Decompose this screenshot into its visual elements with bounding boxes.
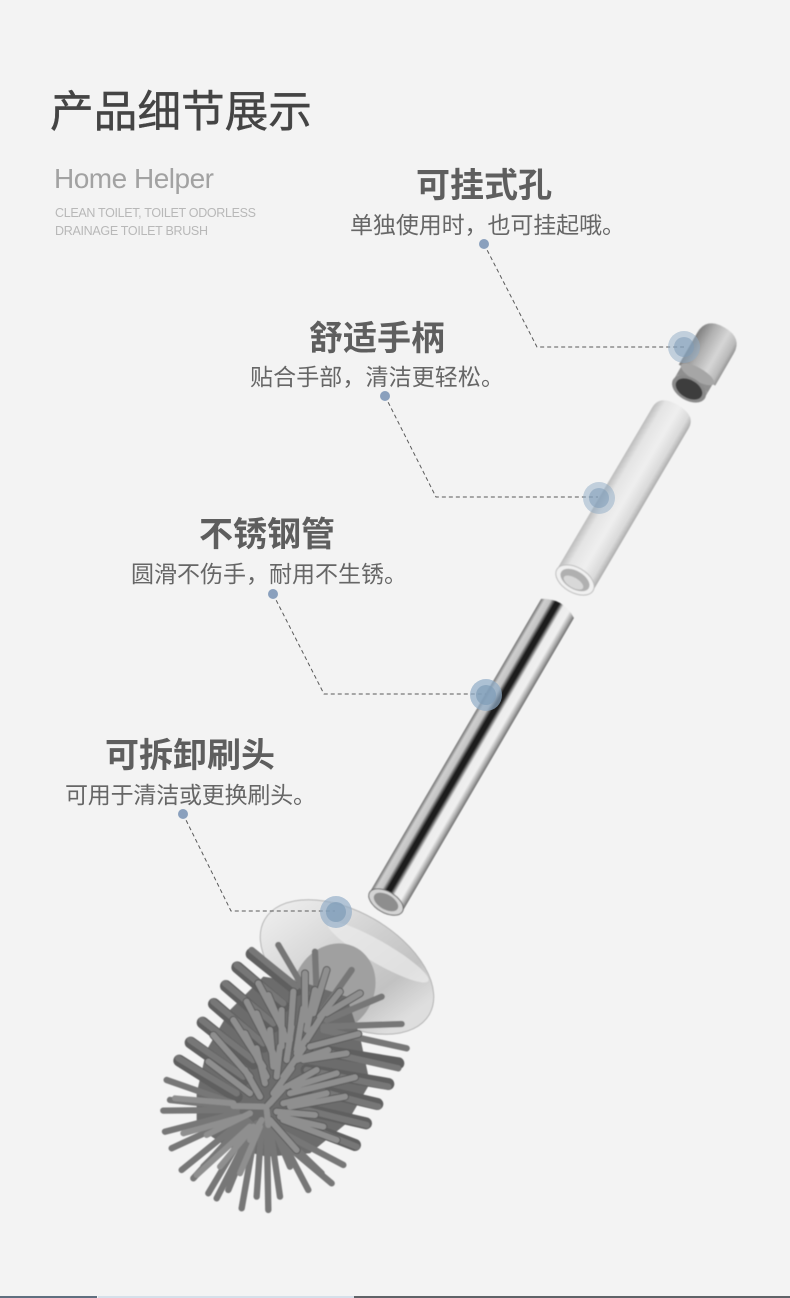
- heading: stainless tube: 不锈钢管: [199, 516, 335, 554]
- white handle: [551, 394, 696, 601]
- marker: comfortable handle: [583, 482, 615, 514]
- description: hanging hole: 单独使用时，也可挂起哦。: [350, 212, 625, 238]
- suction disc: [237, 872, 457, 1062]
- description: stainless tube: 圆滑不伤手，耐用不生锈。: [131, 561, 407, 587]
- dot: stainless tube: [268, 589, 278, 599]
- heading: comfortable handle: 舒适手柄: [309, 320, 445, 358]
- dot: hanging hole: [479, 239, 489, 249]
- callout: stainless tube: [131, 516, 502, 711]
- dot: detachable head: [178, 809, 188, 819]
- bottom edge strip: [0, 1296, 790, 1298]
- subtitle: description line 1: CLEAN TOILET, TOILET ODORLESS: [55, 206, 256, 220]
- subtitle: Home Helper: Home Helper: [54, 163, 214, 194]
- title: 产品细节展示: [50, 88, 312, 137]
- subtitle block: [54, 163, 256, 238]
- brush head illustration: [163, 872, 457, 1210]
- dot: comfortable handle: [380, 391, 390, 401]
- callout: comfortable handle: [250, 320, 615, 514]
- bristles: [163, 945, 407, 1210]
- marker: detachable head: [320, 896, 352, 928]
- callout: hanging hole: [350, 167, 700, 363]
- leader line: detachable head: [183, 814, 335, 911]
- marker: stainless tube: [470, 679, 502, 711]
- description: comfortable handle: 贴合手部，清洁更轻松。: [250, 364, 504, 390]
- leader line: hanging hole: [484, 244, 684, 347]
- description: detachable head: 可用于清洁或更换刷头。: [65, 782, 316, 808]
- callout: detachable head: [65, 737, 352, 928]
- leader line: stainless tube: [273, 594, 486, 694]
- heading: hanging hole: 可挂式孔: [416, 167, 552, 205]
- marker: hanging hole: [668, 331, 700, 363]
- leader line: comfortable handle: [385, 396, 598, 497]
- hanging hole cap: [665, 317, 743, 409]
- heading: detachable head: 可拆卸刷头: [105, 737, 275, 775]
- subtitle: description line 2: DRAINAGE TOILET BRUSH: [55, 224, 208, 238]
- stainless steel tube: [364, 594, 577, 921]
